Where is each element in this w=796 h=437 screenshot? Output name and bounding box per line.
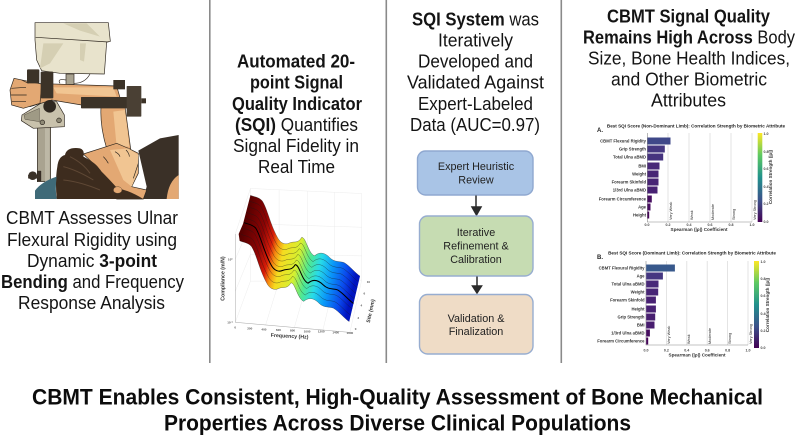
heading: signal quality remains high: Attributes — [651, 90, 726, 110]
chart A: non-dominant limb correlation bars: 0.0 — [764, 220, 768, 224]
chart A: non-dominant limb correlation bars: 0.4 — [764, 185, 768, 189]
chart: 3D compliance surface: 1000 — [304, 329, 311, 333]
chart B: dominant limb correlation bars: BMI — [637, 322, 644, 328]
chart: 3D compliance surface: 2 — [357, 316, 359, 320]
chart B: dominant limb correlation bars: Total Ulna aBMD — [612, 282, 644, 286]
chart B: dominant limb correlation bars: 1.0 — [760, 260, 766, 264]
flow box: validation and finalization: Validation & — [448, 313, 505, 325]
chart B: dominant limb correlation bars: Moderate — [708, 328, 712, 344]
chart B: dominant limb correlation bars: Age — [637, 274, 645, 278]
chart: 3D compliance surface: 6 — [364, 292, 366, 296]
chart A: non-dominant limb correlation bars: Age — [638, 204, 647, 210]
chart A: non-dominant limb correlation bars: Weak — [690, 210, 694, 220]
chart: 3D compliance surface: 1400 — [332, 330, 339, 334]
chart A: non-dominant limb correlation bars: Weight — [632, 172, 647, 176]
chart B: dominant limb correlation bars: Forearm Skinfold — [610, 298, 645, 302]
chart A: non-dominant limb correlation bars: Forearm Circumference — [599, 196, 647, 202]
chart B: dominant limb correlation bars: Grip Strength — [618, 314, 645, 320]
chart A: non-dominant limb correlation bars: Very Weak — [669, 202, 673, 220]
chart: 3D compliance surface: 0 — [234, 325, 236, 329]
heading: SQI system development: Iteratively — [438, 30, 513, 50]
chart: 3D compliance surface: 1600 — [347, 331, 354, 335]
heading: automated signal quality indicator: Automated 20- — [237, 52, 355, 72]
heading: automated signal quality indicator: point Signal — [250, 72, 343, 92]
flow box: iterative refinement — [420, 216, 533, 276]
heading: SQI system development: SQI System was — [412, 10, 539, 30]
heading: SQI system development: Developed and — [418, 52, 533, 72]
chart B: dominant limb correlation bars: 0.8 — [725, 348, 730, 352]
chart B: dominant limb correlation bars: Very Weak — [667, 326, 671, 344]
chart: 3D compliance surface: 600 — [276, 328, 281, 332]
chart A: non-dominant limb correlation bars: Height — [633, 212, 647, 218]
heading: signal quality remains high: Size, Bone Health Indices, — [588, 48, 790, 68]
chart A: non-dominant limb correlation bars: Forearm Skinfold — [612, 180, 646, 184]
chart B: dominant limb correlation bars: Best SQI Score (Dominant Limb): Correlation Strength by Biometric Attribute — [608, 250, 776, 256]
chart: 3D compliance surface: 10⁰ — [228, 257, 233, 261]
chart: 3D compliance surface: 10⁻¹ — [227, 320, 233, 324]
text block: CBMT description — [1, 208, 184, 313]
flow box: validation and finalization: Finalization — [449, 326, 503, 338]
panel: SQI system — [407, 10, 544, 354]
chart A: non-dominant limb correlation bars: Moderate — [711, 204, 715, 220]
chart A: non-dominant limb correlation bars: 1/3rd Ulna aBMD — [613, 188, 646, 192]
panel: signal quality across biometrics — [583, 6, 795, 358]
chart: 3D compliance surface: 400 — [261, 327, 267, 331]
chart A: non-dominant limb correlation bars: 0.2 — [764, 202, 768, 206]
heading: signal quality remains high: CBMT Signal Quality — [607, 6, 770, 26]
chart: 3D compliance surface: Compliance (m/N) — [220, 256, 226, 301]
chart: 3D compliance surface: Site (mm) — [366, 299, 377, 323]
title: bottom conclusion — [32, 384, 763, 436]
chart B: dominant limb correlation bars: 0.8 — [760, 277, 766, 281]
chart A: non-dominant limb correlation bars: 0.6 — [708, 223, 712, 227]
panel: CBMT assessment — [1, 23, 184, 313]
chart A: non-dominant limb correlation bars: Total Ulna aBMD — [613, 154, 646, 160]
chart B: dominant limb correlation bars: 0.6 — [760, 294, 766, 298]
flow box: expert heuristic review: Expert Heuristic — [438, 161, 515, 173]
chart A: non-dominant limb correlation bars: CBMT Flexural Rigidity — [600, 138, 647, 144]
heading: SQI system development: Data (AUC=0.97) — [410, 115, 540, 135]
title: bottom conclusion: CBMT Enables Consistent, High-Quality Assessment of Bone Mechanical — [32, 384, 763, 410]
heading: signal quality remains high: Remains High Across Body — [583, 28, 795, 48]
chart A: non-dominant limb correlation bars: Strong — [732, 209, 736, 220]
chart B: dominant limb correlation bars: 0.6 — [705, 348, 710, 352]
chart B: dominant limb correlation bars: 0.2 — [664, 348, 669, 352]
heading: automated signal quality indicator: Real Time — [258, 157, 335, 177]
text block: CBMT description: CBMT Assesses Ulnar — [6, 208, 178, 228]
heading: signal quality remains high: and Other Biometric — [611, 70, 767, 90]
chart B: dominant limb correlation bars: Height — [631, 306, 645, 312]
text block: CBMT description: Dynamic 3-point — [27, 251, 157, 271]
chart A: non-dominant limb correlation bars: 0.2 — [666, 223, 670, 227]
chart B: dominant limb correlation bars: B. — [597, 255, 603, 261]
chart B: dominant limb correlation bars: Weight — [631, 290, 645, 294]
flow box: iterative refinement: Calibration — [450, 254, 502, 266]
heading: automated signal quality indicator: Signal Fidelity in — [233, 136, 359, 156]
chart: 3D compliance surface: 4 — [361, 303, 363, 307]
chart A: non-dominant limb correlation bars: BMI — [638, 164, 646, 168]
chart B: dominant limb correlation bars: Correlation Strength (|ρ|) — [765, 277, 770, 332]
chart A: non-dominant limb correlation bars: Grip Strength — [619, 146, 646, 152]
chart A: non-dominant limb correlation bars: 0.8 — [764, 150, 768, 154]
chart B: dominant limb correlation bars: 1/3rd Ulna aBMD — [611, 330, 644, 336]
heading: automated signal quality indicator: Quality Indicator — [232, 94, 362, 114]
chart B: dominant limb correlation bars: 0.2 — [760, 329, 766, 333]
heading: SQI system development: Validated Against — [407, 72, 544, 92]
title: bottom conclusion: Properties Across Diverse Clinical Populations — [164, 410, 631, 436]
chart A: non-dominant limb correlation bars: 0.6 — [764, 167, 768, 171]
chart: 3D compliance surface: Frequency (Hz) — [271, 333, 309, 341]
arrow: review to refinement — [472, 196, 481, 215]
heading: signal quality remains high — [583, 6, 795, 110]
chart A: non-dominant limb correlation bars: 0.8 — [728, 223, 734, 227]
panel: automated SQI — [220, 52, 377, 341]
chart A: non-dominant limb correlation bars: Very Strong — [753, 200, 757, 220]
chart B: dominant limb correlation bars: CBMT Flexural Rigidity — [599, 266, 645, 270]
chart: 3D compliance surface: 0 — [355, 327, 357, 331]
flow box: iterative refinement: Iterative — [457, 227, 495, 239]
flow box: validation and finalization — [420, 294, 533, 354]
chart: 3D compliance surface: 10 — [367, 280, 370, 284]
chart A: non-dominant limb correlation bars: 1.0 — [750, 223, 754, 227]
chart A: non-dominant limb correlation bars: 0.0 — [644, 223, 650, 227]
chart B: dominant limb correlation bars: Weak — [687, 334, 691, 344]
chart: 3D compliance surface: 1200 — [318, 330, 325, 334]
text block: CBMT description: Response Analysis — [18, 293, 165, 313]
text block: CBMT description: Flexural Rigidity using — [7, 230, 177, 250]
illustration: patient in 3-point bending device — [10, 22, 179, 200]
chart: 3D compliance surface: 800 — [290, 329, 295, 333]
chart A: non-dominant limb correlation bars: 1.0 — [764, 132, 768, 136]
flow box: expert heuristic review — [418, 151, 533, 195]
heading: SQI system development: Expert-Labeled — [418, 94, 533, 114]
chart A: non-dominant limb correlation bars: Spearman (|ρ|) Coefficient — [671, 227, 728, 232]
heading: automated signal quality indicator: (SQI) Quantifies — [235, 115, 358, 135]
chart: 3D compliance surface — [220, 188, 377, 341]
chart A: non-dominant limb correlation bars: A. — [597, 128, 603, 134]
chart B: dominant limb correlation bars: 1.0 — [746, 348, 750, 352]
chart B: dominant limb correlation bars: Very Strong — [749, 324, 753, 344]
chart B: dominant limb correlation bars: 0.0 — [644, 348, 648, 352]
flow box: iterative refinement: Refinement & — [443, 240, 510, 252]
chart B: dominant limb correlation bars — [597, 250, 776, 358]
text block: CBMT description: Bending and Frequency — [1, 272, 184, 292]
chart B: dominant limb correlation bars: Strong — [728, 333, 732, 344]
heading: SQI system development — [407, 10, 544, 135]
chart B: dominant limb correlation bars: 0.4 — [760, 312, 766, 316]
chart B: dominant limb correlation bars: Spearman (|ρ|) Coefficient — [669, 352, 726, 358]
chart B: dominant limb correlation bars: Forearm Circumference — [597, 338, 645, 344]
arrow: refinement to validation — [472, 276, 482, 293]
chart B: dominant limb correlation bars: 0.0 — [760, 346, 766, 350]
heading: automated signal quality indicator — [232, 52, 362, 177]
chart A: non-dominant limb correlation bars: 0.4 — [686, 223, 692, 227]
chart A: non-dominant limb correlation bars: Best SQI Score (Non-Dominant Limb): Correlation Strength by Biometric Attribute — [607, 124, 786, 128]
flow box: expert heuristic review: Review — [458, 174, 494, 186]
chart A: non-dominant limb correlation bars — [597, 124, 786, 232]
chart A: non-dominant limb correlation bars: Correlation Strength (|ρ|) — [768, 149, 773, 204]
chart B: dominant limb correlation bars: 0.4 — [684, 348, 689, 352]
chart: 3D compliance surface: 200 — [247, 327, 253, 331]
